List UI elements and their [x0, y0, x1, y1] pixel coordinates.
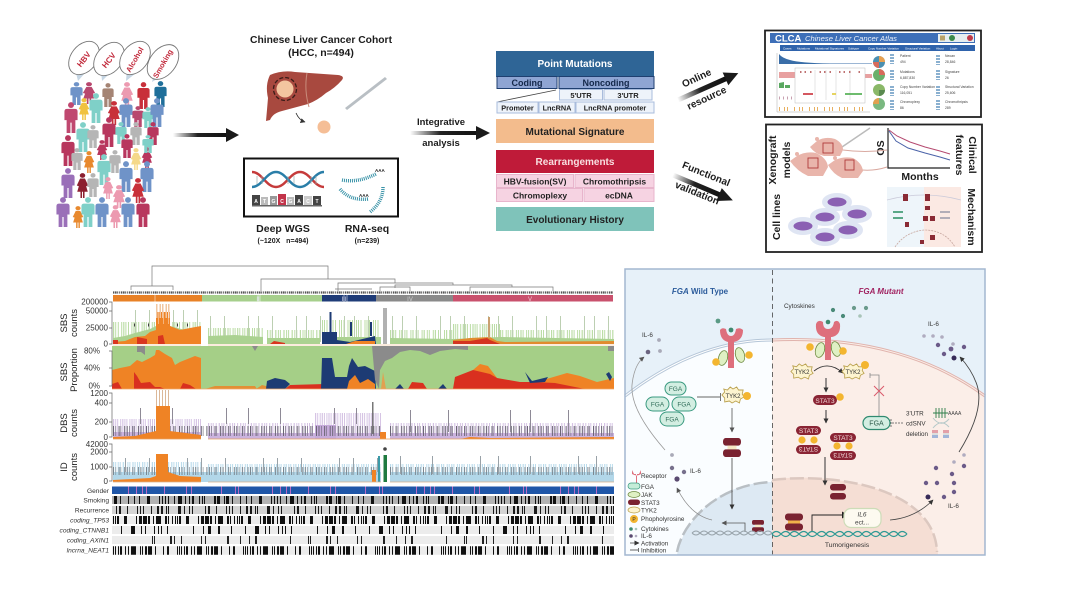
block: evolutionary history [496, 207, 654, 231]
block: rearrangements [496, 150, 654, 202]
legend: JAK [641, 492, 653, 499]
panel: risk factors and patient crowd [56, 35, 185, 228]
speech bubbles: risk factors [62, 35, 185, 85]
heading: FGA Wild Type: FGA Wild Type [672, 287, 729, 296]
block: point mutations: Point Mutations [538, 59, 613, 70]
IL-6 dots and arrows: mutant: IL-6 [948, 503, 959, 510]
portal statistics labels: 25,606 [945, 91, 955, 95]
icon: sequence blocks: A [254, 199, 258, 205]
icon: sequence blocks: G [272, 199, 276, 205]
FGA mutation inhibition: mutant [863, 373, 904, 430]
patient crowd [56, 81, 167, 228]
subtype colour bar: II [256, 297, 260, 303]
labels: validation panel headings: OS [875, 140, 887, 156]
block: point mutations: Promoter [501, 104, 534, 112]
block: point mutations: 5'UTR [570, 91, 592, 100]
DNA: mutant [772, 532, 907, 536]
axis tick labels: 50000 [86, 306, 109, 316]
portal statistics labels: Neoan [945, 54, 955, 58]
track labels: coding_CTNNB1 [60, 528, 109, 534]
thumbnail: mechanism diagram [887, 187, 961, 247]
portal statistics labels: Patient [900, 54, 911, 58]
chart: SBS counts [113, 308, 614, 345]
subtype colour bar: IV [407, 297, 413, 303]
portal statistics labels: 494 [900, 60, 906, 64]
labels: validation panel headings: Xenograft [767, 135, 779, 185]
STAT3 cascade: mutant: STAT3 [799, 428, 819, 435]
axis tick labels [81, 298, 109, 486]
arrow: functional validation: Functional [680, 160, 732, 189]
subtype colour bar: V [528, 297, 532, 303]
track labels: coding_AXIN1 [67, 538, 109, 544]
arrow: integrative analysis [410, 117, 490, 149]
speech bubbles: risk factors: HCV [100, 51, 118, 70]
block: rearrangements: ecDNA [605, 190, 633, 200]
mutation types: mutant: deletion [906, 431, 929, 438]
transcription: mutant: IL6 [857, 512, 867, 518]
portal statistics labels: Signature [945, 70, 960, 74]
track labels: coding_TP53 [70, 518, 109, 524]
labels: validation panel headings: Mechanism [965, 188, 977, 246]
axis tick labels: 400 [95, 398, 109, 408]
STAT3 cascade: mutant: STAT3 [833, 435, 853, 442]
legend: Cytokines [641, 526, 669, 533]
DNA: wild type [692, 531, 772, 535]
panel: analysis categories [496, 51, 654, 231]
axis titles: DBS [59, 413, 70, 433]
dendrogram [113, 266, 613, 292]
portal statistics labels: 116,051 [900, 91, 912, 95]
arrow: integrative analysis: Integrative [417, 117, 465, 128]
pathway backgrounds [625, 269, 985, 555]
STAT3 activation: wild type [722, 408, 764, 532]
portal nav bar: Subtype [848, 46, 859, 50]
axis tick labels: 25000 [86, 324, 109, 332]
panel: genomic landscape chart [59, 266, 614, 554]
FGA proteins: wild type: FGA [677, 402, 691, 408]
legend: Phopholyrosine [641, 516, 685, 523]
portal header [770, 33, 975, 44]
chart: DBS orange overlay [113, 398, 614, 439]
block: point mutations: 3'UTR [617, 91, 639, 100]
portal nav bar: Copy Number Variation [868, 46, 899, 50]
inhibition of TYK2: wild type [697, 387, 751, 403]
block: point mutations [496, 51, 654, 113]
chart: DBS counts [113, 416, 614, 436]
icon: sequence blocks: A [297, 199, 301, 205]
portal statistics labels: Mutations [900, 70, 915, 74]
cytokines: mutant [784, 303, 868, 318]
legend: STAT3 [641, 500, 660, 507]
subtype colour bar: III [341, 297, 347, 303]
heading: FGA Mutant: FGA Mutant [858, 287, 904, 296]
label: Deep WGS: (~120X n=494) [258, 238, 308, 245]
legend: Inhibition [641, 548, 667, 554]
icon: sequence blocks [252, 194, 322, 206]
receptor complex: wild type [712, 319, 753, 368]
portal nav bar: Login [950, 46, 958, 50]
icon: sequence blocks: T [263, 199, 266, 205]
labels: validation panel headings: Cell lines [771, 194, 783, 240]
arrow: functional validation [670, 160, 736, 208]
portal statistics labels: 28,846 [945, 60, 955, 64]
portal header: CLCA [775, 34, 802, 44]
icon: cell line dishes [788, 193, 872, 246]
FGA proteins: wild type [646, 382, 696, 426]
track labels: Smoking [83, 498, 109, 504]
icon: liver with tumour and scalpel [266, 71, 387, 134]
chart: survival curves [888, 128, 950, 168]
TYK2 activation: mutant: TYK2 [845, 370, 861, 376]
block: point mutations: LncRNA [543, 104, 572, 112]
panel: CLCA web portal [765, 30, 981, 117]
portal statistics labels: Chromothripsis [945, 100, 968, 104]
block: point mutations: Noncoding [582, 78, 630, 88]
axis titles: Proportion [69, 348, 80, 392]
axis tick labels: 42000 [86, 440, 109, 449]
axis titles [59, 309, 80, 481]
portal statistics labels: Structural Variation [945, 85, 974, 89]
axis titles: SBS [59, 313, 70, 333]
axis titles: ID [59, 462, 70, 472]
speech bubbles: risk factors: HBV [75, 50, 93, 69]
arrow: online resource [675, 67, 741, 113]
box: sequencing methods [244, 158, 398, 216]
inhibition of TYK2: wild type: TYK2 [725, 394, 741, 400]
block: rearrangements: Rearrangements [536, 157, 615, 168]
icon: RNA strands: AAA [375, 168, 385, 173]
portal nav bar: Structural Variation [905, 46, 931, 50]
labels: validation panel headings: Clinical [966, 136, 978, 174]
IL-6 dots and arrows: mutant [890, 321, 979, 520]
label: Tumorigenesis: Tumorigenesis [825, 542, 870, 549]
arrow: integrative analysis: analysis [422, 138, 460, 149]
heading: Chinese Liver Cancer Cohort: (HCC, n=494) [288, 47, 354, 59]
IL-6 dots and arrows: wild type [632, 357, 712, 520]
arrow: functional validation: validation [673, 180, 721, 208]
FGA mutation inhibition: mutant: FGA [869, 420, 884, 428]
label: Deep WGS: Deep WGS [256, 223, 310, 235]
IL-6 dots and arrows: wild type: IL-6 [690, 468, 701, 475]
heading: Chinese Liver Cancer Cohort [250, 34, 392, 59]
axis titles: counts [69, 409, 80, 437]
STAT3 cascade: mutant: STAT3 [798, 445, 818, 452]
icon: RNA strands: AAA [359, 193, 369, 198]
arrow: cohort to samples [173, 128, 239, 142]
block: evolutionary history: Evolutionary History [526, 215, 624, 226]
clinical and gene tracks [112, 486, 614, 550]
label: Deep WGS [256, 223, 310, 245]
legend: Receptor [641, 473, 667, 480]
legend: IL-6 [641, 533, 652, 540]
legend: FGA [641, 484, 655, 491]
icon: sequence blocks: T [315, 199, 319, 205]
arrow: online resource: resource [685, 85, 729, 113]
track labels [60, 488, 110, 554]
FGA proteins: wild type: FGA [669, 386, 683, 393]
axis tick labels: 80% [84, 346, 100, 356]
mutation types: mutant [906, 408, 962, 438]
axis titles: counts [69, 453, 80, 481]
axis tick labels: 0 [104, 340, 109, 348]
axis titles: SBS [59, 362, 70, 382]
portal statistics labels: 86 [900, 106, 904, 110]
mutation types: mutant: 3'UTR [906, 410, 924, 418]
panel: functional validation [766, 124, 982, 252]
portal nav bar: Mutations [797, 46, 811, 50]
chart: ID counts [113, 465, 614, 477]
portal statistics labels [892, 54, 974, 110]
portal statistics pies [873, 56, 885, 110]
label: RNA-seq [345, 223, 389, 245]
block: rearrangements: Chromothripsis [583, 176, 646, 186]
track labels: Recurrence [75, 508, 109, 514]
block: point mutations: LncRNA promoter [584, 104, 646, 112]
chart: SBS proportion [112, 346, 614, 389]
STAT3 cascade: mutant [796, 378, 856, 500]
portal nav bar: About [936, 46, 944, 50]
track labels: lncrna_NEAT1 [67, 548, 109, 554]
legend: TYK2 [641, 508, 657, 514]
block: mutational signature [496, 119, 654, 143]
axes and tick marks [109, 302, 112, 481]
receptor complex: mutant [806, 320, 847, 360]
cytokines: mutant: Cytoskines [784, 303, 815, 310]
portal statistics labels: 6,887,830 [900, 76, 915, 80]
icon: xenograft mice [790, 128, 887, 178]
axis tick labels: 2000 [90, 448, 109, 456]
axis tick labels: 40% [84, 364, 100, 372]
legend: P [632, 517, 636, 523]
transcription: mutant: ect... [855, 520, 869, 526]
legend: Activation [641, 540, 669, 548]
IL-6 secretion: wild type upper: IL-6 [642, 332, 653, 339]
label: RNA-seq: RNA-seq [345, 223, 389, 235]
panel: FGA signalling pathway [625, 269, 985, 555]
speech bubbles: risk factors: Smoking [151, 47, 175, 80]
mutation types: mutant: cdSNV [906, 420, 926, 428]
axis titles: counts [69, 309, 80, 337]
FGA proteins: wild type: FGA [665, 416, 679, 424]
STAT3 cascade: mutant: STAT3 [815, 398, 835, 405]
axis tick labels: 1000 [90, 462, 109, 472]
legend [628, 470, 685, 554]
subtype colour bar [113, 295, 613, 303]
axis tick labels: 200 [95, 418, 109, 426]
IL-6 secretion: wild type upper [642, 332, 662, 354]
block: rearrangements: Chromoplexy [513, 190, 567, 200]
block: mutational signature: Mutational Signature [526, 127, 625, 138]
icon: sequence blocks: G [289, 199, 293, 205]
axis tick labels: 0% [88, 382, 100, 390]
portal statistics labels: 289 [945, 106, 951, 110]
portal statistics labels: Chromoplexy [900, 100, 920, 104]
portal header: Chinese Liver Cancer Atlas [805, 34, 897, 43]
arrow: online resource: Online [681, 67, 714, 90]
labels: validation panel headings: Months [901, 171, 939, 183]
labels: validation panel headings [767, 135, 978, 246]
axis tick labels: 0 [104, 477, 109, 486]
icon: RNA strands [340, 168, 385, 212]
portal nav bar: Cases [783, 46, 792, 50]
portal nav bar: Mutational Signatures [815, 46, 845, 50]
portal charts [777, 53, 872, 112]
transcription: mutant [785, 508, 881, 531]
portal nav bar [771, 45, 975, 51]
TYK2 activation: mutant [791, 361, 869, 379]
block: rearrangements: HBV-fusion(SV) [504, 176, 567, 186]
icon: DNA helix [252, 172, 324, 187]
chart: ID orange and green overlay [113, 447, 614, 482]
heading: Chinese Liver Cancer Cohort: Chinese Liver Cancer Cohort [250, 34, 392, 46]
speech bubbles: risk factors: Alcohol [124, 46, 146, 74]
label: RNA-seq: (n=239) [355, 238, 379, 245]
STAT3 cascade: mutant: STAT3 [833, 451, 853, 458]
axis tick labels: 0 [104, 433, 109, 442]
FGA proteins: wild type: FGA [651, 402, 665, 408]
labels: validation panel headings: features [953, 135, 965, 176]
axis tick labels: 1200 [90, 389, 109, 398]
track labels: Gender [87, 488, 110, 495]
portal statistics labels: Copy Number Variation [900, 85, 935, 89]
block: point mutations: Coding [512, 78, 542, 88]
axis tick labels: 200000 [81, 298, 109, 306]
icon: sequence blocks: C [280, 199, 284, 205]
TYK2 activation: mutant: TYK2 [794, 370, 810, 376]
icon: sequence blocks: C [306, 199, 310, 205]
portal statistics labels: 26 [945, 76, 949, 80]
mutation types: mutant: AAAA [948, 411, 962, 417]
IL-6 dots and arrows: mutant: IL-6 [928, 321, 939, 328]
labels: validation panel headings: models [781, 141, 793, 178]
